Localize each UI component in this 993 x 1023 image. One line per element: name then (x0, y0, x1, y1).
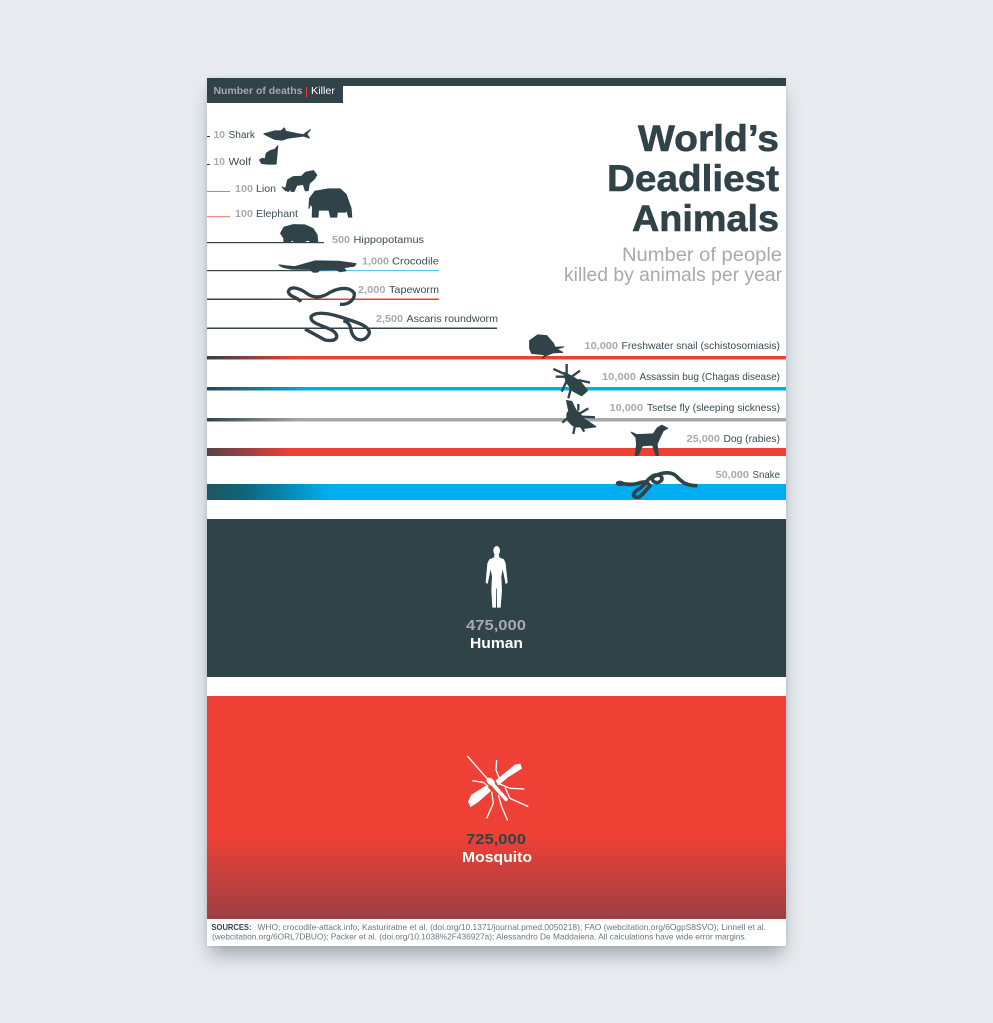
row: ascaris roundworm: Ascaris roundworm (406, 313, 498, 325)
row: wolf: Wolf (228, 156, 251, 168)
row: tsetse fly: 10,000 (610, 402, 643, 414)
row: tsetse fly (207, 401, 786, 434)
header bar: Killer (311, 86, 336, 97)
panel: mosquito: 725,000 (466, 832, 526, 848)
infographic card (207, 78, 786, 946)
title: Deadliest (607, 158, 779, 199)
icon: mosquito (467, 756, 528, 821)
row: tapeworm: Tapeworm (389, 284, 439, 296)
icon: human figure (486, 546, 508, 608)
header bar (207, 78, 786, 103)
row: elephant: Elephant (256, 208, 298, 220)
row: crocodile: 1,000 (362, 256, 389, 268)
row: tapeworm: 2,000 (358, 284, 386, 296)
panel: human: Human (470, 636, 523, 652)
sources: WHO; crocodile-attack.info; Kasturiratne et al. (doi.org/10.1371/journal.pmed.0050218); FAO (webcitation.org/6OgpS8SVO); Linnell et al. (258, 922, 766, 932)
row: assassin bug: 10,000 (602, 371, 636, 383)
row: ascaris roundworm (207, 313, 498, 340)
row: ascaris roundworm: 2,500 (376, 313, 403, 325)
row: shark (207, 128, 310, 141)
subtitle (564, 244, 782, 286)
row: crocodile (207, 256, 439, 272)
row: freshwater snail: Freshwater snail (schistosomiasis) (622, 340, 780, 352)
sources: SOURCES: (212, 922, 252, 932)
row: elephant: 100 (235, 208, 253, 220)
row: tapeworm (207, 284, 439, 304)
row: wolf: 10 (214, 156, 225, 168)
row: crocodile: Crocodile (392, 256, 439, 268)
row: freshwater snail: 10,000 (584, 340, 618, 352)
panel: mosquito: Mosquito (462, 850, 532, 866)
row: snake (207, 469, 786, 500)
row: freshwater snail (207, 335, 786, 360)
row: wolf (207, 146, 278, 168)
row: dog: Dog (rabies) (724, 433, 780, 445)
row: lion (207, 171, 317, 195)
title (607, 118, 779, 239)
row: hippopotamus (207, 225, 424, 246)
row: shark: Shark (228, 129, 256, 141)
row: hippopotamus: Hippopotamus (354, 234, 424, 246)
header bar: Number of deaths (214, 86, 303, 97)
row: elephant (207, 189, 352, 220)
row: snake: Snake (752, 469, 780, 481)
row: dog (207, 425, 786, 456)
panel: mosquito (207, 696, 786, 919)
sources (212, 922, 766, 942)
subtitle: Number of people (622, 244, 782, 266)
row: snake: 50,000 (716, 469, 749, 481)
panel: human: 475,000 (466, 618, 526, 634)
subtitle: killed by animals per year (564, 264, 782, 286)
row: lion: 100 (235, 183, 253, 195)
title: Animals (632, 198, 779, 239)
row: shark: 10 (214, 129, 225, 141)
row: assassin bug: Assassin bug (Chagas disease) (640, 371, 780, 383)
row: assassin bug (207, 364, 786, 398)
title: World’s (638, 118, 779, 159)
row: hippopotamus: 500 (332, 234, 350, 246)
row: dog: 25,000 (686, 433, 720, 445)
panel: human (207, 519, 786, 677)
row: tsetse fly: Tsetse fly (sleeping sickness) (647, 402, 780, 414)
sources: (webcitation.org/6ORL7DBUO); Packer et al. (doi.org/10.1038%2F436927a); Alessandro De Maddalena. All calculations have wide error margins. (212, 932, 747, 942)
row: lion: Lion (256, 183, 276, 195)
